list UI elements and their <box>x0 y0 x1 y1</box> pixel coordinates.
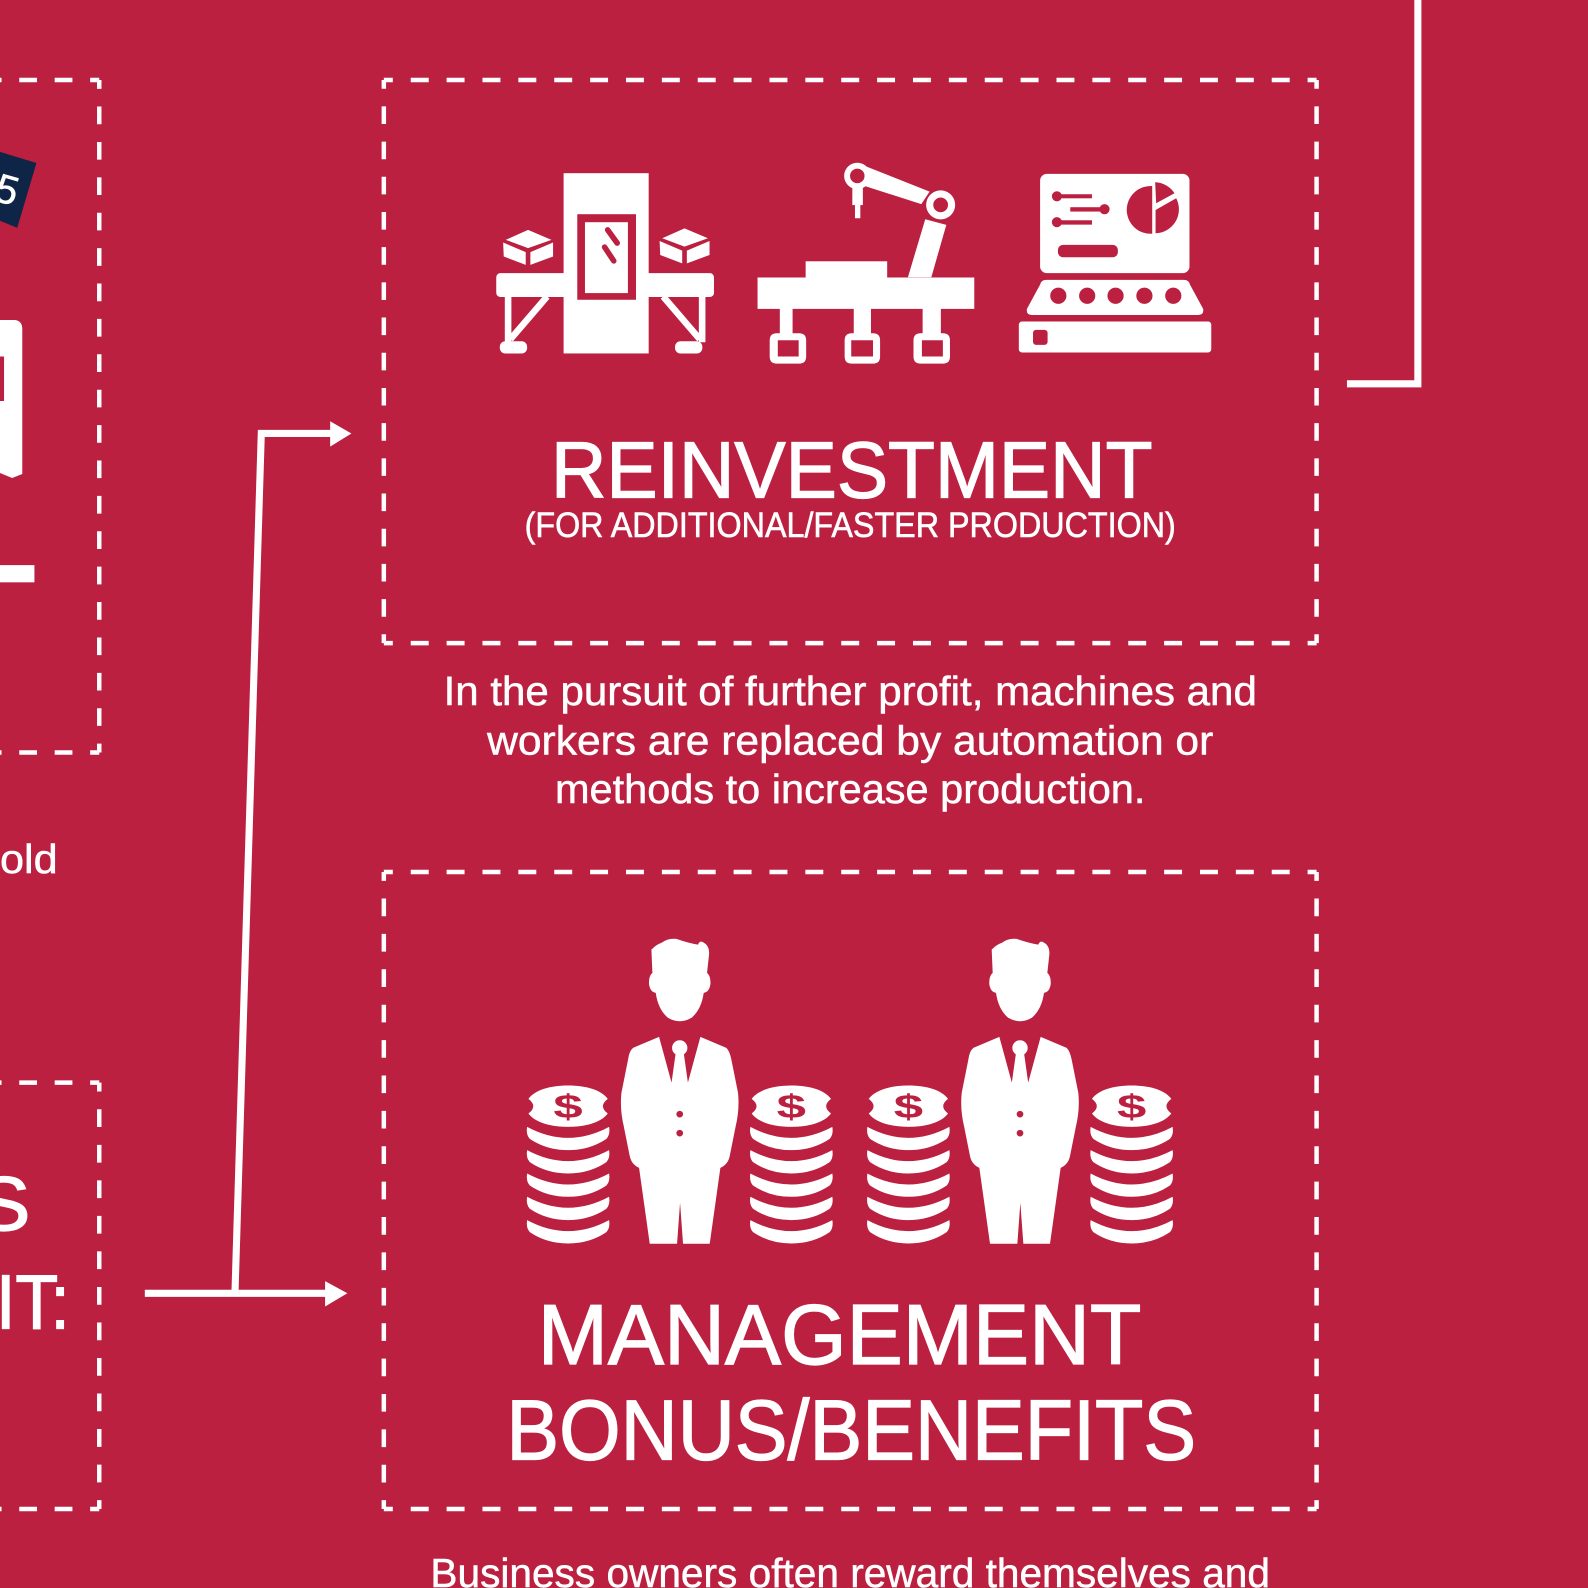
icon: computer terminal <box>1019 174 1211 352</box>
icon: first manager and coins: $ <box>553 1089 584 1126</box>
text: reinvestment description: In the pursuit of further profit, machines and <box>444 668 1257 714</box>
text: cropped caption fragment: old <box>0 836 58 882</box>
icon: robot arm <box>758 163 974 364</box>
subheading: additional production: (FOR ADDITIONAL/FASTER PRODUCTION) <box>525 505 1176 545</box>
icon: cropped white product shape <box>0 320 22 478</box>
panel: cropped lower left box <box>0 1083 99 1509</box>
icon: managers with coin stacks <box>527 939 1173 1244</box>
text: reinvestment description <box>444 668 1257 812</box>
icon: first manager and coins <box>527 939 833 1244</box>
icon: navy price tag <box>0 152 36 228</box>
arrow: profit to reinvestment <box>235 421 351 1293</box>
connector: top right bracket <box>1347 0 1418 384</box>
text: reinvestment description: methods to increase production. <box>555 766 1145 812</box>
arrow: profit to management bonus <box>145 1281 347 1306</box>
icon: second manager and coins: $ <box>1117 1089 1147 1126</box>
panel: management bonus and benefits <box>384 872 1317 1509</box>
heading: cropped profit label <box>0 1161 70 1346</box>
heading: bonus and benefits: BONUS/BENEFITS <box>506 1383 1196 1478</box>
icon: second manager and coins: $ <box>894 1089 924 1126</box>
panel: reinvestment <box>384 80 1317 643</box>
icon: second manager and coins <box>867 939 1173 1244</box>
heading: reinvestment: REINVESTMENT <box>551 425 1153 514</box>
icon: first manager and coins: $ <box>777 1089 807 1126</box>
heading: management: MANAGEMENT <box>538 1288 1141 1383</box>
text: reinvestment description: workers are replaced by automation or <box>486 718 1213 764</box>
icon: conveyor scanner <box>496 173 714 353</box>
panel: cropped upper left box <box>0 80 99 752</box>
icon: cropped white bar <box>0 565 34 582</box>
